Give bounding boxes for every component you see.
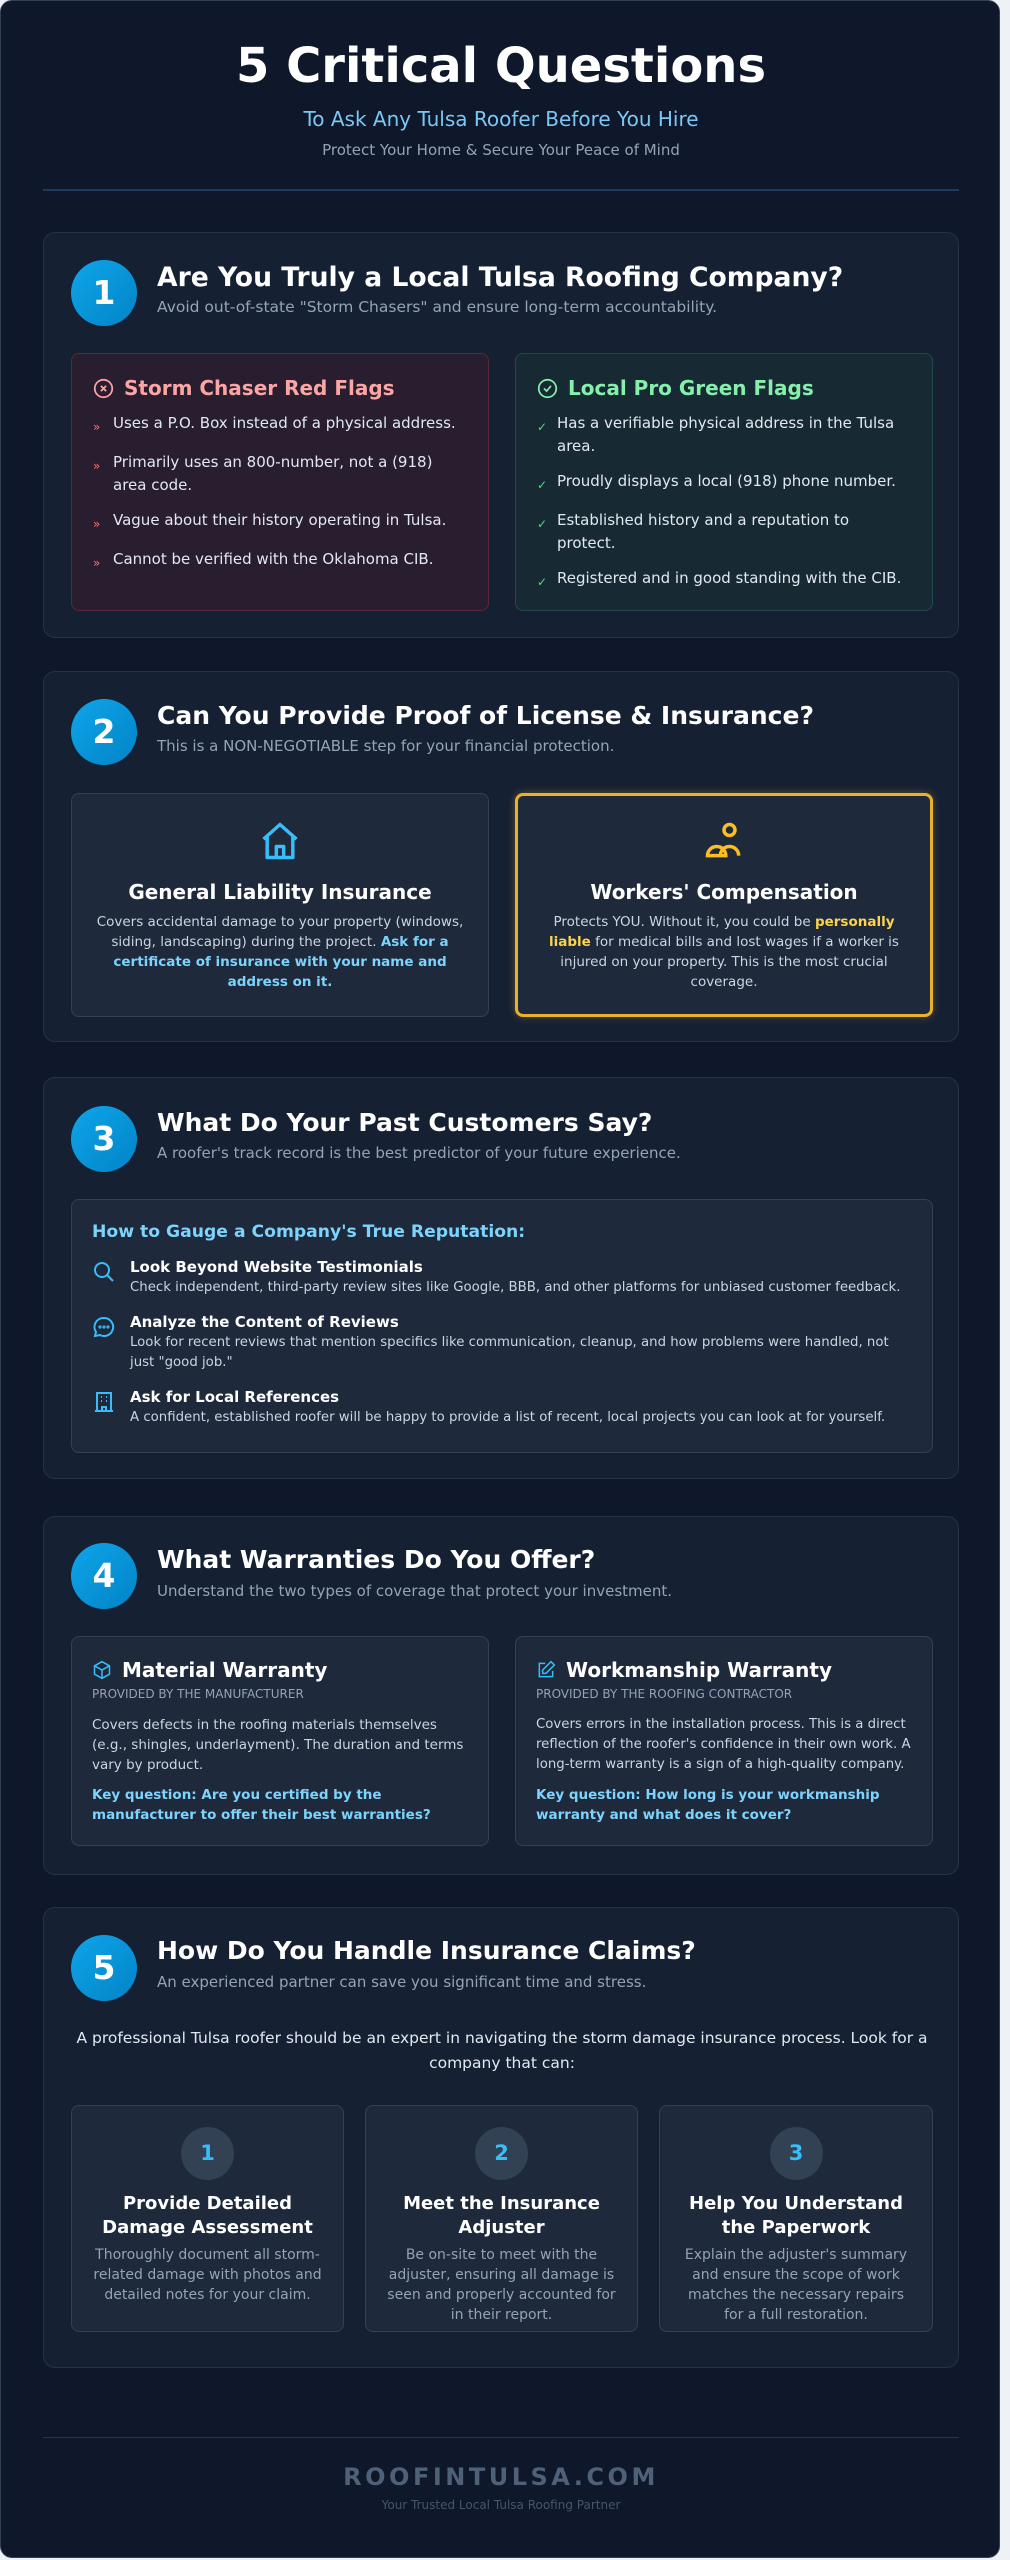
step card 2: 2 (494, 2141, 509, 2165)
number badge 1 (71, 260, 137, 326)
red flag list: Vague about their history operating in Tulsa. (113, 511, 446, 529)
footer brand: ROOFINTULSA.COM (343, 2463, 659, 2491)
step card 2: Meet the Insurance Adjuster (403, 2193, 600, 2238)
red flag list: » (93, 517, 100, 531)
title: 5 Critical Questions (236, 38, 766, 94)
panel: question 2 (43, 671, 959, 1042)
item: references: A confident, established roofer will be happy to provide a list of recent, local projects you can look at for yourself. (130, 1410, 885, 1425)
step card 3 (659, 2105, 933, 2332)
reputation box (71, 1199, 933, 1453)
number badge 2: 2 (93, 712, 115, 751)
workmanship text: Covers errors in the installation process. This is a direct reflection of the roofer's confidence in their own work. A long-term warranty is a sign of a high-quality company. (536, 1717, 911, 1772)
step card 3: Help You Understand the Paperwork (689, 2193, 903, 2238)
green flag list: Established history and a reputation to protect. (557, 511, 849, 552)
item: testimonials: Check independent, third-party review sites like Google, BBB, and other platforms for unbiased customer feedback. (130, 1280, 900, 1295)
red flag list: Cannot be verified with the Oklahoma CIB. (113, 550, 433, 568)
green flag list: Registered and in good standing with the CIB. (557, 569, 901, 587)
tagline: Protect Your Home & Secure Your Peace of Mind (322, 141, 680, 159)
step card 2 (365, 2105, 638, 2332)
step card 3: 3 (789, 2141, 803, 2165)
card: material warranty: PROVIDED BY THE MANUFACTURER (92, 1687, 304, 1701)
icon: chat (94, 1317, 114, 1338)
green flag list: ✓ (537, 575, 547, 589)
number badge 1: 1 (93, 273, 115, 312)
card: workmanship warranty (515, 1636, 933, 1846)
number badge 5: 5 (93, 1948, 115, 1987)
panel: question 3 (43, 1077, 959, 1479)
red flag list: » (93, 556, 100, 570)
item: analyze reviews (94, 1313, 889, 1370)
green flags title: Local Pro Green Flags (568, 376, 814, 400)
step card 3: Explain the adjuster's summary and ensure the scope of work matches the necessary repairs for a full restoration. (685, 2247, 907, 2323)
item: references (95, 1388, 885, 1425)
subheading 1: Avoid out-of-state "Storm Chasers" and ensure long-term accountability. (157, 298, 717, 316)
step card 1: 1 (200, 2141, 215, 2165)
material key question: Key question: Are you certified by the manufacturer to offer their best warranties? (92, 1787, 431, 1823)
card: material warranty (71, 1636, 489, 1846)
green flag list: Has a verifiable physical address in the Tulsa area. (557, 414, 894, 455)
icon: search (94, 1262, 114, 1282)
item: testimonials (94, 1258, 900, 1295)
panel: question 1 (43, 232, 959, 638)
number badge 3: 3 (93, 1119, 115, 1158)
green flag list: ✓ (537, 420, 547, 434)
heading 5: How Do You Handle Insurance Claims? (157, 1936, 696, 1965)
green flag list: ✓ (537, 517, 547, 531)
card: green flags (515, 353, 933, 611)
material text: Covers defects in the roofing materials themselves (e.g., shingles, underlayment). The duration and terms vary by product. (92, 1717, 463, 1773)
number badge 5 (71, 1935, 137, 2001)
number badge 3 (71, 1106, 137, 1172)
green flag list (537, 414, 901, 589)
red flag list: Primarily uses an 800-number, not a (918) area code. (113, 453, 432, 494)
workmanship key question: Key question: How long is your workmanship warranty and what does it cover? (536, 1787, 880, 1823)
icon: building (95, 1392, 113, 1412)
heading 3: What Do Your Past Customers Say? (157, 1108, 652, 1137)
intro text: A professional Tulsa roofer should be an expert in navigating the storm damage insurance process. Look for a company that can: (76, 2029, 928, 2072)
item: analyze reviews: Analyze the Content of Reviews (130, 1313, 399, 1331)
liability title: General Liability Insurance (128, 880, 432, 904)
step card 1: Provide Detailed Damage Assessment (102, 2193, 313, 2238)
card: general liability (71, 793, 489, 1017)
red flags title: Storm Chaser Red Flags (124, 376, 395, 400)
subheading 3: A roofer's track record is the best predictor of your future experience. (157, 1144, 681, 1162)
step card 1 (71, 2105, 344, 2332)
red flag list: » (93, 420, 100, 434)
number badge 4: 4 (93, 1556, 115, 1595)
panel: question 4 (43, 1516, 959, 1875)
red flag list: » (93, 459, 100, 473)
heading 2: Can You Provide Proof of License & Insurance? (157, 701, 814, 730)
heading 1: Are You Truly a Local Tulsa Roofing Company? (157, 262, 843, 293)
number badge 2 (71, 699, 137, 765)
green flag list: ✓ (537, 478, 547, 492)
step card 1: Thoroughly document all storm-related damage with photos and detailed notes for your claim. (93, 2247, 322, 2303)
card: workers comp (515, 793, 933, 1017)
item: testimonials: Look Beyond Website Testimonials (130, 1258, 423, 1276)
item: analyze reviews: Look for recent reviews that mention specifics like communication, cleanup, and how problems were handled, not just "good job." (130, 1335, 889, 1370)
item: references: Ask for Local References (130, 1388, 339, 1406)
workmanship title: Workmanship Warranty (566, 1658, 832, 1682)
subheading 4: Understand the two types of coverage that protect your investment. (157, 1582, 672, 1600)
reputation heading: How to Gauge a Company's True Reputation: (92, 1222, 525, 1242)
card: red flags (71, 353, 489, 611)
card: workmanship warranty: PROVIDED BY THE ROOFING CONTRACTOR (536, 1687, 792, 1701)
red flag list (93, 414, 456, 570)
red flag list: Uses a P.O. Box instead of a physical address. (113, 414, 456, 432)
heading 4: What Warranties Do You Offer? (157, 1545, 595, 1574)
number badge 4 (71, 1543, 137, 1609)
workers comp text: Protects YOU. Without it, you could be personally liable for medical bills and lost wages if a worker is injured on your property. This is the most crucial coverage. (549, 914, 899, 990)
icon: worker (706, 822, 740, 858)
workers comp title: Workers' Compensation (590, 880, 858, 904)
material title: Material Warranty (122, 1658, 327, 1682)
footer tagline: Your Trusted Local Tulsa Roofing Partner (382, 2498, 620, 2512)
subheading 2: This is a NON-NEGOTIABLE step for your financial protection. (157, 737, 614, 755)
panel: question 5 (43, 1907, 959, 2368)
icon: house (262, 822, 298, 860)
subheading 5: An experienced partner can save you significant time and stress. (157, 1973, 646, 1991)
liability text: Covers accidental damage to your property (windows, siding, landscaping) during the project. Ask for a certificate of insurance with your name and address on it. (97, 914, 463, 990)
green flag list: Proudly displays a local (918) phone number. (557, 472, 896, 490)
step card 2: Be on-site to meet with the adjuster, ensuring all damage is seen and properly accounted for in their report. (387, 2247, 616, 2323)
subtitle: To Ask Any Tulsa Roofer Before You Hire (303, 107, 699, 131)
